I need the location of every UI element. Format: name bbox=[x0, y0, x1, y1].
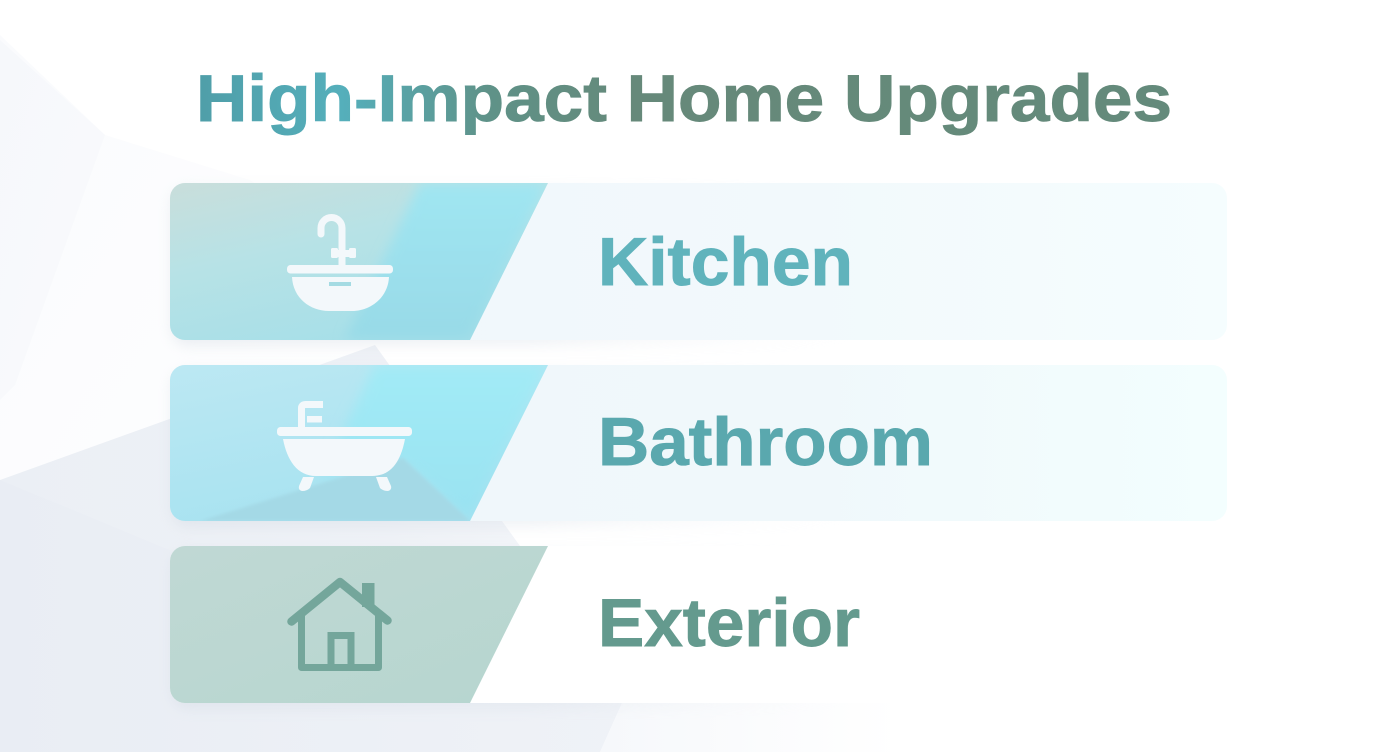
tab shaded facet bbox=[214, 460, 464, 520]
kitchen label: Kitchen bbox=[598, 224, 853, 300]
exterior label: Exterior bbox=[598, 585, 860, 661]
bathroom label: Bathroom bbox=[598, 404, 933, 480]
icon: bathtub bbox=[277, 404, 412, 491]
tab bright facet bbox=[340, 365, 546, 518]
kitchen colour tab bbox=[170, 183, 548, 340]
title: High-Impact Home Upgrades bbox=[196, 61, 1172, 135]
panel: exterior bbox=[170, 546, 860, 703]
icon: sink bbox=[287, 218, 393, 311]
icon: house bbox=[292, 582, 388, 668]
row shadows bbox=[172, 189, 902, 708]
exterior colour tab bbox=[170, 546, 548, 703]
tab bright facet bbox=[345, 183, 548, 340]
bathroom colour tab bbox=[170, 365, 548, 521]
panel: bathroom bbox=[170, 365, 1227, 521]
panel: kitchen bbox=[170, 183, 1227, 340]
